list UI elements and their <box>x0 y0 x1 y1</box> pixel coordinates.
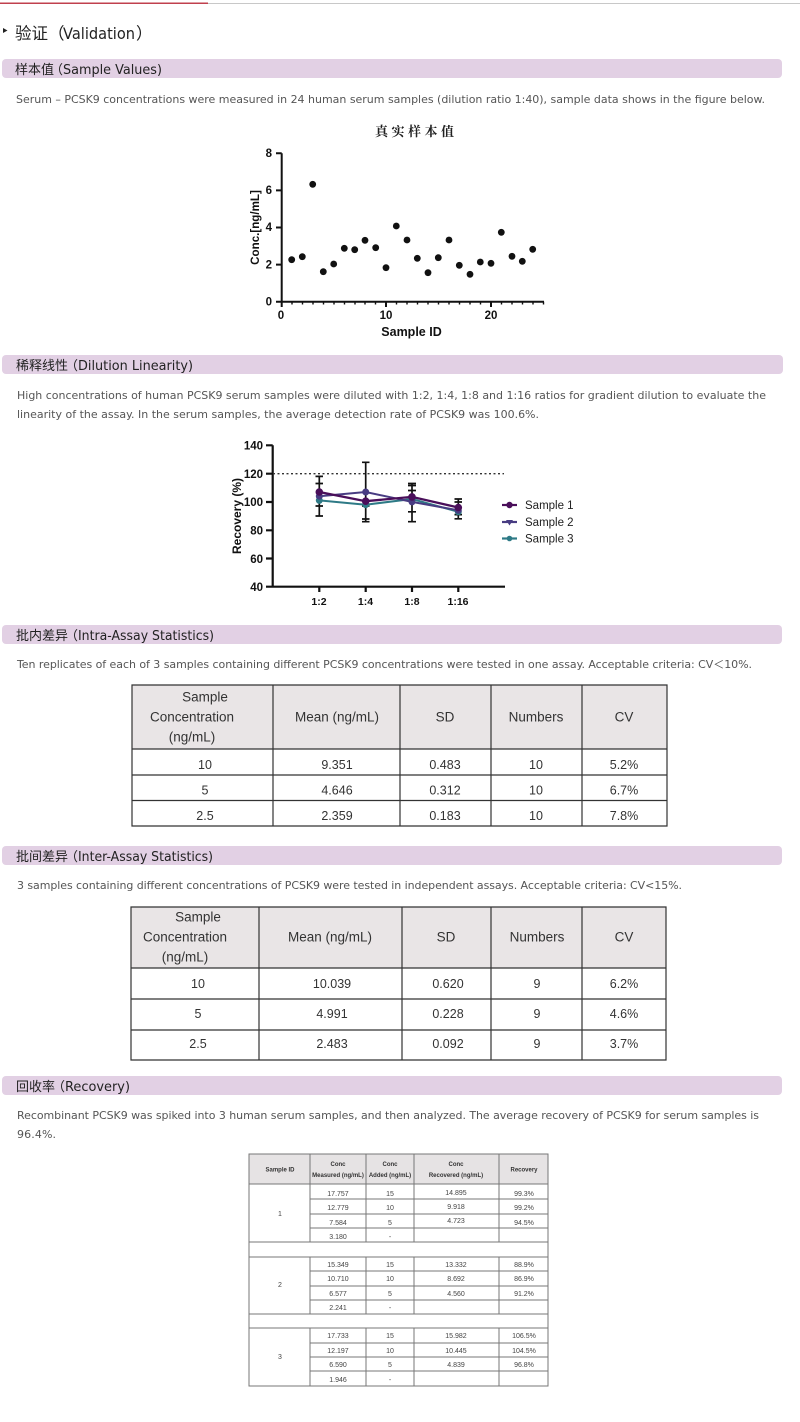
table: recovery: 6.577 <box>329 1291 347 1298</box>
series: sample 2 <box>316 489 461 513</box>
table: intra-assay statistics: Mean (ng/mL) <box>295 710 379 724</box>
table: recovery: 99.2% <box>514 1205 534 1212</box>
text: recovery description <box>17 1109 759 1141</box>
section heading: dilution linearity: （ <box>65 358 78 373</box>
table: recovery: 1.946 <box>329 1377 347 1384</box>
table: inter-assay statistics: 9 <box>534 977 541 991</box>
table: intra-assay statistics: Numbers <box>509 710 564 724</box>
text: sample values description: Serum – PCSK9 concentrations were measured in 24 human serum samples (dilution ratio 1:40), sample data shows in the figure below. <box>16 93 765 106</box>
table: intra-assay statistics: (ng/mL) <box>169 730 215 744</box>
scatter chart: sample values: 6 <box>266 185 272 197</box>
table: recovery: 3 <box>278 1354 282 1361</box>
title <box>3 24 152 43</box>
table: inter-assay statistics: CV <box>615 930 633 944</box>
table: inter-assay statistics: Mean (ng/mL) <box>288 930 372 944</box>
text: recovery description: 96.4%. <box>17 1128 56 1141</box>
table: recovery: 5 <box>388 1362 392 1369</box>
table: inter-assay statistics: 5 <box>195 1007 202 1021</box>
table: intra-assay statistics: 2.359 <box>321 809 353 823</box>
table: intra-assay statistics: 2.5 <box>196 809 214 823</box>
table: recovery: 2 <box>278 1282 282 1289</box>
table: intra-assay statistics: 10 <box>529 758 543 772</box>
section heading: recovery: （ <box>52 1079 65 1094</box>
section heading: inter-assay statistics: （ <box>65 849 78 864</box>
section heading: intra-assay statistics: Intra-Assay Statistics) <box>78 628 214 644</box>
table: inter-assay statistics: Concentration <box>143 930 227 944</box>
line chart: dilution recovery: 1:4 <box>358 596 373 608</box>
table: recovery: 10.445 <box>445 1348 467 1355</box>
line chart: dilution recovery: 100 <box>244 497 263 509</box>
error bars <box>316 462 462 522</box>
line chart: dilution recovery: 120 <box>244 469 263 481</box>
table: recovery: 91.2% <box>514 1291 534 1298</box>
table: recovery: 12.197 <box>327 1348 349 1355</box>
table: recovery: - <box>389 1377 392 1384</box>
table: inter-assay statistics: 3.7% <box>610 1037 638 1051</box>
title: 验证（ <box>15 24 64 43</box>
line chart: dilution recovery: 80 <box>250 526 263 538</box>
table: inter-assay statistics: 2.483 <box>316 1037 348 1051</box>
table: inter-assay statistics: 4.6% <box>610 1007 638 1021</box>
table: recovery: 3.180 <box>329 1234 347 1241</box>
table: inter-assay statistics: (ng/mL) <box>162 950 208 964</box>
section heading: intra-assay statistics: 批内差异 <box>16 628 68 643</box>
table: intra-assay statistics: 0.312 <box>429 784 461 798</box>
table: inter-assay statistics: 10.039 <box>313 977 351 991</box>
table: recovery: 10.710 <box>327 1276 349 1283</box>
scatter chart: sample values: Conc.[ng/mL] <box>249 190 262 265</box>
table: inter-assay statistics: 10 <box>191 977 205 991</box>
table: recovery: Conc <box>330 1162 346 1168</box>
scatter chart: sample values: Sample ID <box>381 325 442 339</box>
table: recovery: - <box>389 1234 392 1241</box>
table: recovery: 17.733 <box>327 1333 349 1340</box>
legend <box>502 500 574 546</box>
table: intra-assay statistics: 10 <box>198 758 212 772</box>
scatter chart: sample values: 0 <box>266 296 272 308</box>
table: intra-assay statistics: 5 <box>202 784 209 798</box>
table: intra-assay statistics: CV <box>615 710 633 724</box>
table: inter-assay statistics: 9 <box>534 1007 541 1021</box>
table: recovery: Measured (ng/mL) <box>312 1173 364 1179</box>
section heading: inter-assay statistics <box>2 846 782 865</box>
line chart: dilution recovery: 1:16 <box>447 596 469 608</box>
section heading: recovery <box>2 1076 782 1095</box>
title: Validation <box>63 24 135 43</box>
section heading: sample values: Sample Values) <box>63 62 162 78</box>
section heading: dilution linearity: Dilution Linearity) <box>78 358 193 374</box>
table: recovery: 17.757 <box>327 1191 349 1198</box>
table: recovery: 6.590 <box>329 1362 347 1369</box>
scatter chart: sample values: 真实样本值 <box>375 124 454 139</box>
table: recovery: 7.584 <box>329 1220 347 1227</box>
table: recovery: Sample ID <box>265 1168 295 1174</box>
table: inter-assay statistics: 4.991 <box>316 1007 348 1021</box>
line chart: dilution recovery: 140 <box>244 440 263 452</box>
table: recovery: 14.895 <box>445 1190 467 1197</box>
line chart: dilution recovery: 60 <box>250 554 263 566</box>
line chart: dilution recovery: 40 <box>250 582 263 594</box>
section heading: inter-assay statistics: 批间差异 <box>16 849 68 864</box>
table: recovery: 8.692 <box>447 1276 465 1283</box>
table: inter-assay statistics: 6.2% <box>610 977 638 991</box>
table: recovery: 96.8% <box>514 1362 534 1369</box>
table: recovery: 5 <box>388 1291 392 1298</box>
scatter chart: sample values: 0 <box>278 310 284 322</box>
table: inter-assay statistics: 2.5 <box>189 1037 207 1051</box>
line chart: dilution recovery <box>230 440 574 608</box>
section heading: intra-assay statistics: （ <box>65 628 78 643</box>
table: recovery: 9.918 <box>447 1204 465 1211</box>
scatter chart: sample values <box>249 124 544 339</box>
table: recovery: - <box>389 1305 392 1312</box>
table: inter-assay statistics: 9 <box>534 1037 541 1051</box>
section heading: intra-assay statistics <box>2 625 782 644</box>
table: recovery <box>249 1154 548 1386</box>
table: recovery: 104.5% <box>512 1348 536 1355</box>
table: recovery: 99.3% <box>514 1191 534 1198</box>
table: recovery: 10 <box>386 1348 394 1355</box>
section heading: dilution linearity: 稀释线性 <box>16 358 68 373</box>
series: sample 3 <box>316 496 461 515</box>
text: dilution linearity description: High concentrations of human PCSK9 serum samples were diluted with 1:2, 1:4, 1:8 and 1:16 ratios for gradient dilution to evaluate the <box>17 389 766 402</box>
table: inter-assay statistics: 0.092 <box>432 1037 464 1051</box>
table: intra-assay statistics: 10 <box>529 809 543 823</box>
text: recovery description: Recombinant PCSK9 was spiked into 3 human serum samples, and then analyzed. The average recovery of PCSK9 for serum samples is <box>17 1109 759 1122</box>
table: inter-assay statistics: 0.620 <box>432 977 464 991</box>
text: dilution linearity description: linearity of the assay. In the serum samples, the average detection rate of PCSK9 was 100.6%. <box>17 408 539 421</box>
table: recovery: 13.332 <box>445 1262 467 1269</box>
table: intra-assay statistics: 0.183 <box>429 809 461 823</box>
table: recovery: 15 <box>386 1191 394 1198</box>
table: intra-assay statistics: 9.351 <box>321 758 353 772</box>
series: sample 1 <box>316 489 462 511</box>
text: intra-assay description: Ten replicates of each of 3 samples containing different PCSK9 concentrations were tested in one assay. Acceptable criteria: CV＜10%. <box>16 658 752 671</box>
table: intra-assay statistics: 5.2% <box>610 758 638 772</box>
table: intra-assay statistics: Sample <box>182 690 228 704</box>
table: recovery: 86.9% <box>514 1276 534 1283</box>
line chart: dilution recovery: 1:8 <box>404 596 420 608</box>
table: intra-assay statistics: 0.483 <box>429 758 461 772</box>
table: inter-assay statistics: SD <box>437 930 456 944</box>
scatter chart: sample values: 10 <box>380 310 392 322</box>
table: recovery: 5 <box>388 1220 392 1227</box>
table: intra-assay statistics: Concentration <box>150 710 234 724</box>
scatter chart: sample values: 8 <box>266 148 273 160</box>
legend: Sample 2 <box>525 517 574 529</box>
table: recovery: 10 <box>386 1205 394 1212</box>
section heading: recovery: Recovery) <box>65 1079 130 1095</box>
title: ） <box>136 24 152 43</box>
section heading: dilution linearity <box>2 355 783 374</box>
legend: Sample 1 <box>525 500 574 512</box>
table: recovery: 15.349 <box>327 1262 349 1269</box>
table: intra-assay statistics: 6.7% <box>610 784 638 798</box>
table: recovery: 12.779 <box>327 1205 349 1212</box>
table: recovery: 106.5% <box>512 1333 536 1340</box>
table: recovery: 15 <box>386 1262 394 1269</box>
section heading: sample values: （ <box>50 62 63 77</box>
table: inter-assay statistics: Sample <box>175 910 221 924</box>
table: recovery: 4.723 <box>447 1218 465 1225</box>
table: recovery: 4.560 <box>447 1291 465 1298</box>
table: intra-assay statistics: SD <box>436 710 455 724</box>
table: intra-assay statistics <box>132 685 667 826</box>
line chart: dilution recovery: 1:2 <box>311 596 327 608</box>
section heading: sample values: 样本值 <box>15 62 54 77</box>
section heading: inter-assay statistics: Inter-Assay Statistics) <box>78 849 213 865</box>
table: recovery: 4.839 <box>447 1362 465 1369</box>
table: intra-assay statistics: 4.646 <box>321 784 353 798</box>
section heading: sample values <box>2 59 782 78</box>
scatter chart: sample values: 4 <box>266 222 273 234</box>
legend: Sample 3 <box>525 534 574 546</box>
table: recovery: Recovered (ng/mL) <box>429 1173 483 1179</box>
table: recovery: 15.982 <box>445 1333 467 1340</box>
table: intra-assay statistics: 10 <box>529 784 543 798</box>
section heading: recovery: 回收率 <box>16 1079 55 1094</box>
table: recovery: 2.241 <box>329 1305 347 1312</box>
line chart: dilution recovery: Recovery (%) <box>230 478 244 554</box>
table: recovery: Recovery <box>510 1168 538 1174</box>
table: recovery: 88.9% <box>514 1262 534 1269</box>
table: recovery: 10 <box>386 1276 394 1283</box>
table: inter-assay statistics: Numbers <box>510 930 565 944</box>
text: dilution linearity description <box>17 389 766 421</box>
table: intra-assay statistics: 7.8% <box>610 809 638 823</box>
scatter chart: sample values: 20 <box>485 310 497 322</box>
table: inter-assay statistics: 0.228 <box>432 1007 464 1021</box>
table: recovery: Added (ng/mL) <box>369 1173 411 1179</box>
table: recovery: Conc <box>448 1162 464 1168</box>
text: inter-assay description: 3 samples containing different concentrations of PCSK9 were tested in independent assays. Acceptable criteria: CV<15%. <box>17 879 682 892</box>
table: recovery: 15 <box>386 1333 394 1340</box>
table: recovery: 94.5% <box>514 1220 534 1227</box>
scatter chart: sample values: 2 <box>266 260 272 272</box>
table: inter-assay statistics <box>131 907 666 1060</box>
table: recovery: 1 <box>278 1211 282 1218</box>
table: recovery: Conc <box>382 1162 398 1168</box>
